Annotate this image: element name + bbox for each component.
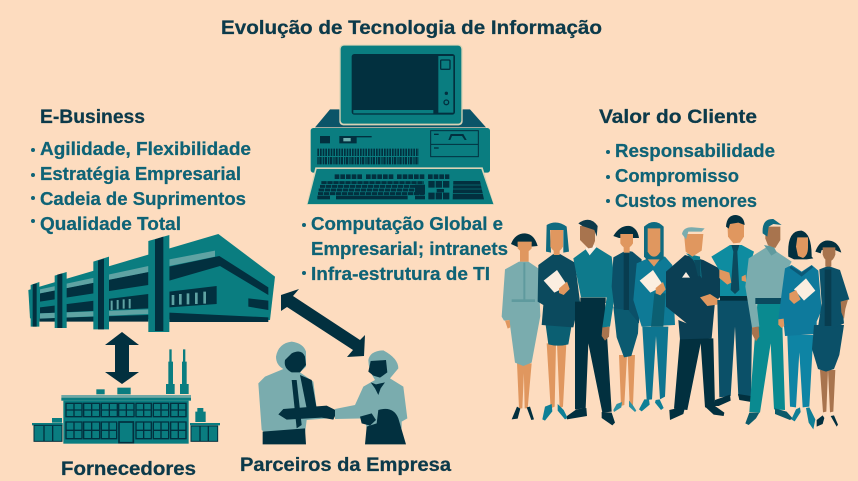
woman xyxy=(335,350,407,428)
icon: computer xyxy=(307,45,494,205)
list: e-business items: Agilidade, Flexibilidade xyxy=(40,139,251,159)
figure: woman 4 xyxy=(633,222,675,411)
window fins xyxy=(111,292,206,310)
icon: partners shaking hands xyxy=(258,342,407,444)
panel: valor do cliente text xyxy=(599,107,775,211)
side wings xyxy=(32,423,63,425)
figure: man in light shirt xyxy=(745,219,793,425)
figure: man 1 xyxy=(567,220,616,425)
title: Evolução de Tecnologia de Informação xyxy=(221,18,602,39)
figure: woman 2 xyxy=(538,223,581,421)
list: e-business items xyxy=(31,139,251,234)
roof xyxy=(61,395,191,398)
list: technology items: Infra-estrutura de TI xyxy=(311,264,490,284)
list: e-business items: Cadeia de Suprimentos xyxy=(40,189,246,209)
windows xyxy=(66,403,186,443)
list: technology items xyxy=(302,214,508,284)
figure: woman 1 xyxy=(502,233,540,420)
label: fornecedores: Fornecedores xyxy=(61,459,196,480)
columns xyxy=(148,235,169,332)
system unit xyxy=(311,128,490,173)
list: technology items: Empresarial; intranets xyxy=(311,239,508,259)
list: e-business items: Qualidade Total xyxy=(40,214,181,234)
list: valor do cliente items: Responsabilidade xyxy=(615,141,775,161)
roof units xyxy=(96,389,105,394)
icon: factory xyxy=(32,349,220,444)
building body xyxy=(28,234,275,320)
figure: older man in suit xyxy=(666,227,728,420)
list: e-business items: Estratégia Empresarial xyxy=(40,164,241,184)
figure: woman with document xyxy=(778,231,822,429)
list: valor do cliente items: Custos menores xyxy=(615,191,757,211)
man xyxy=(258,342,327,437)
dark window bands xyxy=(40,272,148,302)
arrow: building to suppliers xyxy=(105,332,139,384)
list: technology items: Computação Global e xyxy=(311,214,503,234)
list: valor do cliente items: Compromisso xyxy=(615,166,739,186)
arrow: building to partners xyxy=(281,289,365,357)
figure: woman 5 xyxy=(812,241,849,427)
heading: valor do cliente: Valor do Cliente xyxy=(599,107,757,128)
figure: man with tie xyxy=(711,215,754,406)
list: valor do cliente items xyxy=(606,141,775,211)
monitor xyxy=(339,45,463,125)
group: customers xyxy=(502,215,849,429)
heading: e-business: E-Business xyxy=(40,107,145,128)
label: parceiros da empresa: Parceiros da Empresa xyxy=(240,455,451,476)
main facade xyxy=(63,401,189,444)
keyboard xyxy=(307,167,494,205)
figure: woman 3 xyxy=(612,226,642,412)
pale fascia stripes xyxy=(40,266,148,293)
panel: e-business text xyxy=(31,107,251,234)
icon: office building xyxy=(28,234,275,332)
chimneys xyxy=(166,349,175,394)
system unit top xyxy=(315,109,486,127)
